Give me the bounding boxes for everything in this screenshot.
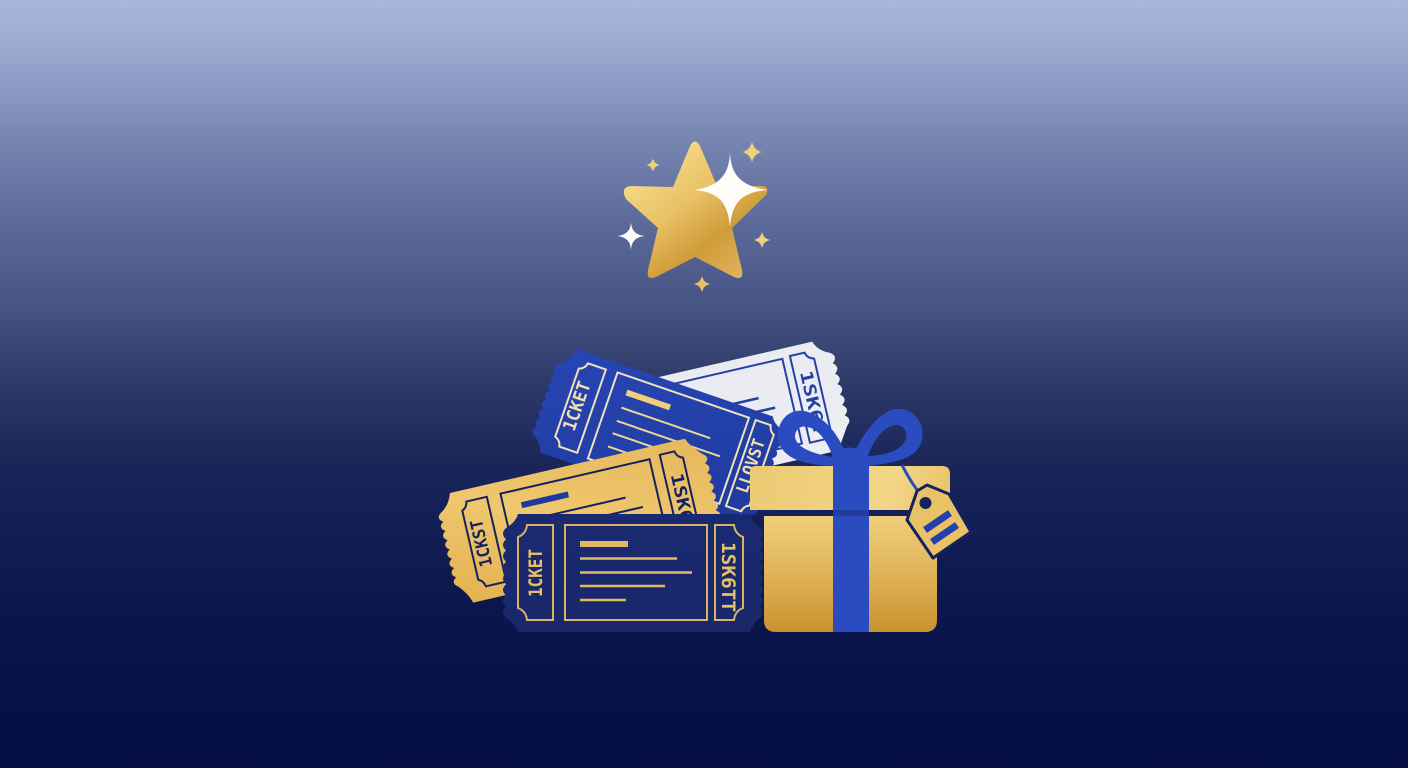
bow left loop	[778, 411, 860, 466]
left stub frame	[460, 497, 506, 588]
left stub frame	[553, 361, 606, 453]
navy title bar	[521, 491, 569, 508]
ticket: blue, tilted	[527, 344, 788, 526]
ticket: navy, front	[503, 514, 763, 632]
right stub frame	[660, 450, 701, 543]
stub label: 1SK6T	[795, 369, 829, 438]
gold title bar	[626, 390, 671, 410]
small white sparkle	[617, 222, 645, 250]
left stub label: 1CKET	[559, 379, 596, 434]
left stub label: 1CKST	[467, 517, 497, 569]
gift lid	[750, 466, 950, 510]
right stub label: 1SK6T	[666, 472, 699, 536]
gold diamond sparkle right	[756, 234, 768, 246]
main frame outline	[588, 372, 749, 504]
white ticket shape	[594, 337, 855, 501]
navy ticket shape	[503, 514, 763, 632]
lid shadow line	[760, 510, 920, 516]
text lines	[580, 558, 692, 600]
right stub frame	[726, 420, 776, 513]
gold title bar	[580, 541, 628, 547]
main frame outline	[625, 359, 802, 480]
main frame outline	[500, 459, 669, 579]
ticket: white, back	[594, 337, 855, 501]
left stub label: 1CKET	[525, 549, 547, 597]
text lines	[701, 395, 775, 424]
main frame outline	[565, 525, 707, 620]
blue ticket shape	[527, 344, 788, 526]
gold diamond sparkle top left	[648, 160, 658, 170]
text lines	[608, 408, 724, 482]
gold star	[624, 142, 767, 278]
tag bars	[925, 513, 957, 542]
right stub label: 1SK6TT	[717, 542, 739, 612]
vertical ribbon	[833, 466, 869, 632]
gift tag	[907, 485, 971, 558]
icon: gift box with bow and tag	[750, 409, 971, 632]
ribbon shadow	[833, 510, 869, 516]
tag string	[902, 465, 925, 500]
gold diamond sparkle bottom	[696, 278, 708, 290]
right stub frame	[715, 525, 743, 620]
gift body	[764, 516, 937, 632]
gold diamond sparkle top right	[744, 144, 760, 160]
bow right loop	[840, 409, 923, 466]
tag hole	[920, 497, 932, 509]
right stub label: LLOVST	[733, 436, 770, 496]
left stub frame	[518, 525, 553, 620]
large white sparkle	[694, 153, 768, 227]
bow knot	[833, 448, 869, 466]
gold ticket shape	[434, 435, 727, 606]
text lines	[525, 494, 643, 533]
ticket: gold, tilted	[434, 435, 727, 606]
icon: gold star with sparkles	[617, 142, 768, 290]
right stub frame	[790, 351, 832, 443]
